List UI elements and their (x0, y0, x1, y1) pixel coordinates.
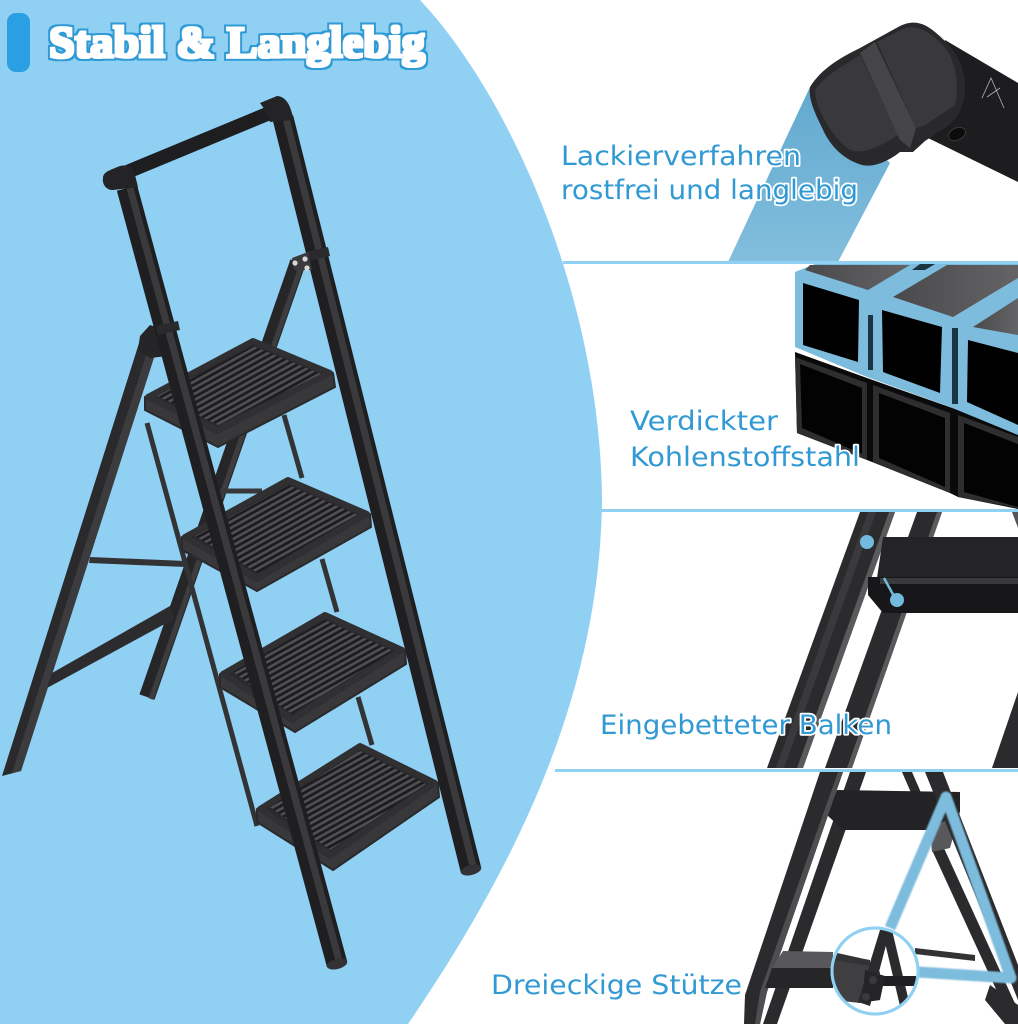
lower black mass (795, 352, 1018, 509)
rear beam (825, 512, 942, 768)
rubber end cap (810, 23, 965, 166)
title: Stabil & Langlebig (49, 18, 425, 67)
label: coating line 2: rostfrei und langlebig (561, 175, 858, 206)
panel: embedded beam close-up (767, 512, 1018, 768)
right lower leg (992, 692, 1018, 768)
front left rail (744, 772, 843, 1024)
tube openings (803, 283, 1018, 425)
blue highlighted tube (728, 87, 890, 262)
bottom rear bars (985, 985, 1018, 1024)
top handle bar (103, 96, 294, 190)
magnifier circle (832, 928, 918, 1014)
heading accent pill (7, 13, 30, 72)
gaps between tubes (868, 264, 958, 404)
rear right leg (147, 262, 302, 699)
step 2 (182, 480, 371, 591)
front right rail (925, 772, 1018, 1000)
main beam (767, 512, 895, 768)
right inner strut (932, 849, 1015, 1003)
step 3 (220, 615, 406, 732)
right front rail (283, 118, 482, 877)
label: steel line 2: Kohlenstoffstahl (630, 442, 860, 473)
blue curved panel (0, 0, 602, 1024)
label: steel: Verdickter (630, 406, 779, 437)
lower box frames (795, 357, 1018, 508)
step 1 (145, 341, 335, 447)
screw hole (948, 127, 966, 141)
engraved lines (982, 78, 1004, 108)
hinge plate with bolts (292, 252, 312, 271)
black tube body (928, 40, 1018, 182)
cross bar (915, 948, 975, 961)
lower box openings (800, 364, 1018, 507)
divider lines (555, 261, 1018, 772)
step ladder illustration (2, 96, 482, 971)
short rear bars (902, 772, 920, 792)
panel: steel tube cross sections (795, 264, 1018, 509)
panel: coating close-up (728, 23, 1018, 262)
thin linkage bars (147, 415, 372, 826)
top faces (805, 265, 1018, 335)
cross braces (47, 491, 262, 688)
step 4 (257, 746, 439, 870)
rear inner left strut (763, 772, 866, 1024)
label: coating: Lackierverfahren (561, 141, 801, 172)
left front rail (127, 188, 348, 971)
lower step (772, 951, 833, 968)
label: support: Dreieckige Stütze (491, 970, 742, 1001)
upper blue mass (795, 264, 1018, 435)
label: beam: Eingebetteter Balken (600, 710, 892, 741)
step top (827, 790, 960, 830)
rear left leg (2, 325, 168, 776)
step profile (877, 537, 1018, 578)
blue marker dots (860, 535, 904, 607)
blue triangle highlight (890, 797, 1011, 978)
panel: triangular support close-up (744, 772, 1018, 1024)
